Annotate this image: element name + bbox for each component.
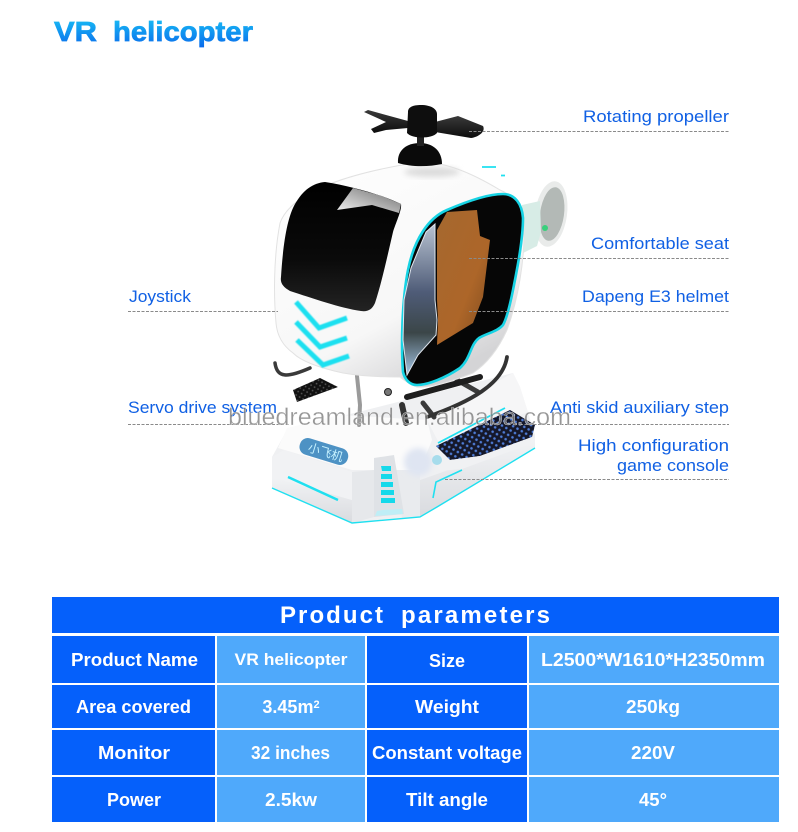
base name plate: 小飞机 [306,441,345,465]
propeller [364,105,484,166]
chevron lights [296,302,349,365]
label: comfortable seat: Comfortable seat [591,234,729,253]
row: product name: Product Name [71,650,198,670]
title: VR [54,16,97,47]
row: power and tilt: 45° [639,790,667,810]
label: joystick: Joystick [129,287,191,306]
right anti-skid step [436,410,535,460]
row: area and weight: 2 [313,699,320,711]
row: monitor and voltage: 220V [631,743,675,763]
parameters table [52,597,779,822]
row: area and weight: Weight [415,697,479,717]
row: area and weight: 250kg [626,697,680,717]
window reflection [337,188,401,213]
label: game console: game console [617,456,729,475]
row: area and weight: Area covered [76,697,191,717]
label: game console [445,436,729,480]
label: anti skid step: Anti skid auxiliary step [550,398,729,417]
cabin body [275,162,524,387]
top light marks [482,167,505,176]
label: servo drive system: Servo drive system [128,398,277,417]
row: power and tilt [52,777,779,822]
label: rotating propeller: Rotating propeller [583,107,729,126]
left window [281,182,401,311]
watermark: bluedreamland.en.alibaba.com [228,404,571,431]
row: power and tilt: Power [107,790,161,810]
row: monitor and voltage [52,730,779,775]
row: area and weight [52,685,779,728]
table heading: parameters [401,602,550,629]
title [54,16,253,47]
label: helmet: Dapeng E3 helmet [582,287,729,306]
roof shading [404,167,460,177]
table heading [52,597,779,633]
undercarriage and skids [275,357,507,425]
platform base [272,373,535,523]
orange seat [437,210,490,345]
title: helicopter [113,16,253,47]
base light panel [374,455,404,517]
row: monitor and voltage: Constant voltage [372,743,522,763]
table heading: Product [280,602,383,629]
row: product name [52,636,779,683]
row: area and weight: 3.45m [262,697,313,717]
VR screen [403,224,437,375]
row: monitor and voltage: Monitor [98,743,170,763]
row: product name: Size [429,651,465,671]
row: product name: L2500*W1610*H2350mm [541,650,765,670]
left step [293,378,338,402]
base name plate [297,436,350,467]
tail cone [522,179,571,253]
row: power and tilt: Tilt angle [406,790,488,810]
helicopter illustration [272,105,571,523]
door opening [402,194,523,385]
label: game console: High configuration [578,436,729,455]
row: monitor and voltage: 32 inches [251,743,330,763]
row: product name: VR helicopter [234,650,348,669]
row: power and tilt: 2.5kw [265,790,318,810]
